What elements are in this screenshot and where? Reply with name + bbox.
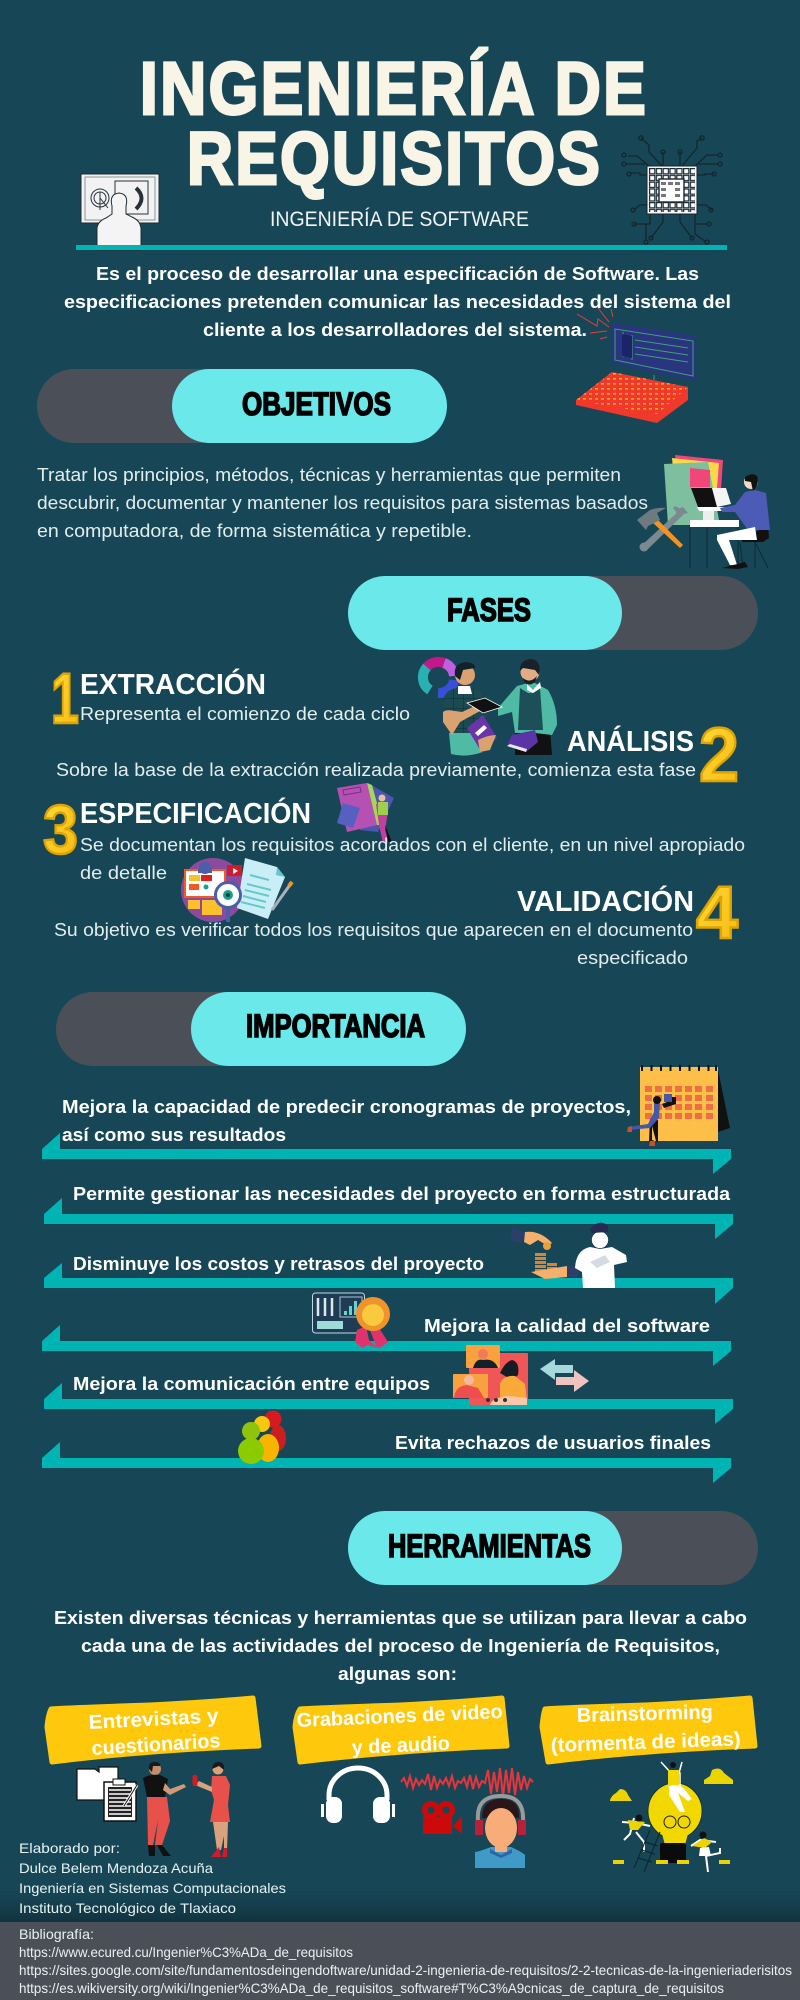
section pill: herramientas: HERRAMIENTAS — [388, 1528, 591, 1564]
illustration: interviewer woman — [192, 1762, 230, 1857]
importance item 5 — [44, 1374, 733, 1424]
importance item 3 — [44, 1254, 733, 1304]
icon: headphones — [321, 1768, 395, 1823]
intro text — [64, 264, 731, 340]
tool label: brainstorming: Brainstorming — [577, 1701, 713, 1727]
icon: laptop circuit — [576, 308, 696, 423]
phase 3: de detalle — [80, 863, 167, 883]
section pill: herramientas — [348, 1511, 758, 1585]
tool label: grabaciones: y de audio — [351, 1733, 450, 1759]
section pill: importancia: IMPORTANCIA — [246, 1008, 425, 1044]
phase 1 — [51, 660, 410, 739]
bibliography footer: https://es.wikiversity.org/wiki/Ingenier%C3%ADa_de_requisitos_software#T%C3%A9cnicas_de_captura_de_requisitos — [19, 1980, 724, 1996]
title: INGENIERÍA DE — [140, 48, 646, 130]
illustration: lightbulb team — [610, 1762, 733, 1872]
icon: video call people — [453, 1345, 528, 1405]
importance item 4 — [42, 1316, 731, 1366]
bibliography footer: Bibliografía: — [19, 1926, 94, 1942]
number 1: 1 — [51, 660, 79, 739]
tools intro text: Existen diversas técnicas y herramientas que se utilizan para llevar a cabo — [54, 1608, 747, 1628]
author credits: Elaborado por: — [19, 1840, 120, 1856]
phase 4: Su objetivo es verificar todos los requisitos que aparecen en el documento — [54, 920, 693, 940]
tools intro text: cada una de las actividades del proceso de Ingeniería de Requisitos, — [81, 1636, 720, 1656]
tools intro text — [54, 1608, 747, 1684]
phase 3: ESPECIFICACIÓN — [80, 796, 311, 830]
illustration: interviewer man — [143, 1762, 186, 1856]
phase 1: EXTRACCIÓN — [80, 667, 266, 701]
illustration: folders and person — [337, 783, 394, 843]
intro text: especificaciones pretenden comunicar las necesidades del sistema del — [64, 292, 731, 312]
tool label: entrevistas — [47, 1698, 259, 1762]
number 3: 3 — [43, 791, 78, 868]
importance item 1 — [42, 1097, 731, 1174]
importance item 6 — [42, 1433, 731, 1483]
tools intro text: algunas son: — [338, 1664, 457, 1684]
icon: film camera — [422, 1801, 462, 1834]
author credits: Ingeniería en Sistemas Computacionales — [19, 1880, 286, 1896]
bibliography footer: https://sites.google.com/site/fundamentosdeingendoftware/unidad-2-ingenieria-de-requisitos/2-2-tecnicas-de-la-ingenieriaderisitos — [19, 1962, 792, 1978]
phase 1: Representa el comienzo de cada ciclo — [80, 704, 410, 724]
icon: dashboard with award medal — [312, 1293, 390, 1348]
icon: hand with coins and person — [510, 1223, 627, 1288]
importance item 1: así como sus resultados — [62, 1125, 286, 1145]
author credits: Dulce Belem Mendoza Acuña — [19, 1860, 213, 1876]
number 2: 2 — [699, 713, 739, 798]
phase 4 — [54, 871, 738, 968]
objectives text: en computadora, de forma sistemática y repetible. — [37, 521, 472, 541]
objectives text: Tratar los principios, métodos, técnicas y herramientas que permiten — [37, 465, 621, 485]
icon: person at screen — [81, 174, 159, 250]
importance item 6: Evita rechazos de usuarios finales — [395, 1433, 711, 1453]
phase 2 — [56, 713, 739, 798]
tool label: entrevistas: Entrevistas y — [88, 1705, 220, 1734]
importance item 2: Permite gestionar las necesidades del proyecto en forma estructurada — [73, 1184, 731, 1204]
icon: colored users group — [238, 1410, 286, 1464]
intro text: Es el proceso de desarrollar una especificación de Software. Las — [96, 264, 699, 284]
phase 3: Se documentan los requisitos acordados con el cliente, en un nivel apropiado — [80, 835, 745, 855]
intro text: cliente a los desarrolladores del sistema. — [203, 320, 587, 340]
tool label: entrevistas: cuestionarios — [91, 1730, 221, 1760]
icon: folder and clipboard — [77, 1767, 137, 1821]
phase 4: VALIDACIÓN — [517, 884, 694, 918]
title — [140, 48, 646, 200]
section pill: objetivos — [37, 369, 447, 443]
importance item 5: Mejora la comunicación entre equipos — [73, 1374, 430, 1394]
objectives text: descubrir, documentar y mantener los requisitos para sistemas basados — [37, 493, 648, 513]
icon: person with headset — [475, 1796, 526, 1868]
phase 4: especificado — [577, 948, 688, 968]
phase 2: ANÁLISIS — [567, 724, 694, 758]
tool label: grabaciones: Grabaciones de video — [296, 1701, 503, 1732]
tool label: brainstorming — [542, 1698, 755, 1762]
phase 2: Sobre la base de la extracción realizada previamente, comienza esta fase — [56, 760, 696, 780]
number 4: 4 — [696, 871, 738, 954]
bibliography footer — [0, 1922, 800, 2000]
illustration: two men with chart — [423, 659, 557, 756]
section pill: fases: FASES — [447, 592, 531, 628]
icon: exchange arrows — [540, 1359, 589, 1392]
importance item 1: Mejora la capacidad de predecir cronogramas de proyectos, — [62, 1097, 631, 1117]
icon: audio waveform — [401, 1768, 533, 1797]
phase 3 — [43, 791, 745, 883]
author credits — [19, 1840, 286, 1916]
bibliography footer: https://www.ecured.cu/Ingenier%C3%ADa_de_requisitos — [19, 1944, 353, 1960]
icon: microchip — [622, 136, 722, 244]
illustration: document review — [181, 858, 292, 922]
section pill: objetivos: OBJETIVOS — [242, 386, 391, 422]
tool label: grabaciones — [295, 1698, 507, 1762]
objectives text — [37, 465, 648, 541]
tool label: brainstorming: (tormenta de ideas) — [550, 1728, 741, 1757]
section pill: importancia — [56, 992, 466, 1066]
icon: calendar with person — [627, 1065, 730, 1146]
footer shadow — [0, 1885, 800, 1922]
divider rule — [76, 245, 727, 250]
importance item 4: Mejora la calidad del software — [424, 1316, 710, 1336]
section pill: fases — [348, 576, 758, 650]
title: REQUISITOS — [187, 118, 600, 200]
author credits: Instituto Tecnológico de Tlaxiaco — [19, 1900, 236, 1916]
subtitle: INGENIERÍA DE SOFTWARE — [270, 208, 529, 231]
importance item 2 — [44, 1184, 733, 1239]
icon: developer at desk with tools — [637, 455, 770, 569]
importance item 3: Disminuye los costos y retrasos del proyecto — [73, 1254, 484, 1274]
